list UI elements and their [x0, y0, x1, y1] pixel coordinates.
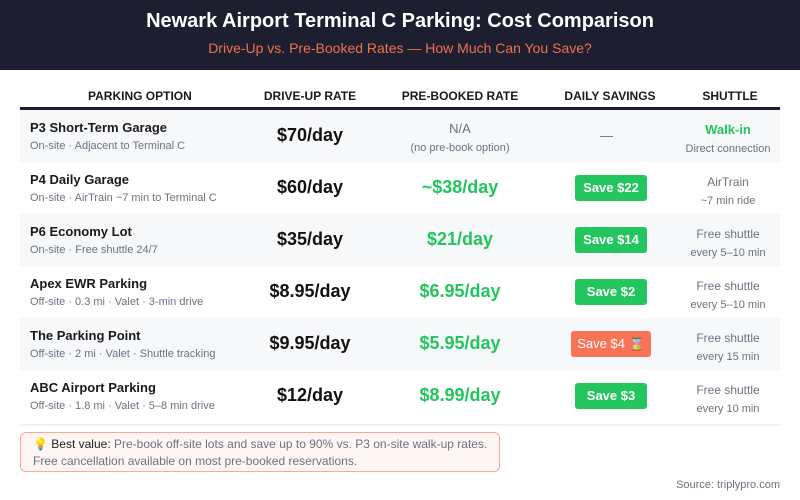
- source: Source: triplypro.com: [676, 479, 780, 491]
- callout: best value: 💡 Best value: Pre-book off-site lots and save up to 90% vs. P3 on-site walk-up rates.: [33, 437, 487, 451]
- row: P3: Walk-in: [705, 122, 751, 137]
- column headers: [88, 89, 758, 103]
- row: ABC: Free shuttle: [696, 383, 760, 397]
- text: SHUTTLE: [702, 89, 758, 103]
- row: ABC: Save $3: [587, 388, 635, 403]
- row: P4: AirTrain: [707, 175, 749, 189]
- row: Parking Point: [20, 318, 780, 370]
- row: ABC: $12/day: [277, 385, 343, 405]
- row: Parking Point: The Parking Point: [30, 328, 141, 343]
- row: ABC: Off-site · 1.8 mi · Valet · 5–8 min drive: [30, 400, 215, 412]
- row: Apex: every 5–10 min: [690, 299, 766, 311]
- row: Apex: Save $2: [587, 284, 635, 299]
- row: Apex: $8.95/day: [269, 281, 351, 301]
- row: P6: $35/day: [277, 229, 343, 249]
- text: DAILY SAVINGS: [564, 89, 656, 103]
- row: P6: every 5–10 min: [690, 247, 766, 259]
- row: P3: —: [600, 128, 613, 143]
- text: PRE-BOOKED RATE: [402, 89, 518, 103]
- row: P3: (no pre-book option): [410, 142, 510, 154]
- row: P4: $60/day: [277, 177, 343, 197]
- row: P3: [20, 110, 780, 162]
- row: P4: Save $22: [583, 180, 639, 195]
- row: Parking Point: Save $4 ⌛: [577, 336, 645, 351]
- row: ABC: $8.99/day: [419, 385, 501, 405]
- row: P6: Save $14: [583, 232, 639, 247]
- row: P4: [30, 172, 755, 207]
- row: Apex: Free shuttle: [696, 279, 760, 293]
- text: DRIVE-UP RATE: [264, 89, 356, 103]
- row: P4: P4 Daily Garage: [30, 172, 129, 187]
- row: Parking Point: Free shuttle: [696, 331, 760, 345]
- row: Parking Point: every 15 min: [696, 351, 759, 363]
- row: P3: Direct connection: [686, 143, 770, 155]
- row: Apex: $6.95/day: [419, 281, 501, 301]
- header: Newark Airport Terminal C Parking: Cost Comparison: [146, 10, 654, 32]
- row: P4: ~7 min ride: [701, 195, 755, 207]
- row: Parking Point: $9.95/day: [269, 333, 351, 353]
- row: P6: Free shuttle: [696, 227, 760, 241]
- row: P6: On-site · Free shuttle 24/7: [30, 244, 158, 256]
- row: ABC: every 10 min: [696, 403, 759, 415]
- text: PARKING OPTION: [88, 89, 192, 103]
- row: Apex: [30, 276, 766, 311]
- row: ABC: ABC Airport Parking: [30, 380, 156, 395]
- row: P6: [20, 214, 780, 266]
- row: P4: ~$38/day: [422, 177, 498, 197]
- row: Apex: Apex EWR Parking: [30, 276, 147, 291]
- callout: best value: Free cancellation available on most pre-booked reservations.: [33, 454, 357, 468]
- row: P3: P3 Short-Term Garage: [30, 120, 167, 135]
- row: Apex: Off-site · 0.3 mi · Valet · 3-min drive: [30, 296, 203, 308]
- row: Parking Point: $5.95/day: [419, 333, 501, 353]
- callout: best value: [20, 432, 500, 472]
- row: P3: $70/day: [277, 125, 343, 145]
- row: P6: $21/day: [427, 229, 493, 249]
- row: P4: On-site · AirTrain ~7 min to Terminal C: [30, 192, 217, 204]
- row: P6: P6 Economy Lot: [30, 224, 132, 239]
- header: [0, 0, 800, 70]
- row: Parking Point: Off-site · 2 mi · Valet · Shuttle tracking: [30, 348, 215, 360]
- row: P3: N/A: [449, 121, 471, 136]
- header: Drive-Up vs. Pre-Booked Rates — How Much Can You Save?: [208, 40, 592, 56]
- row: P3: On-site · Adjacent to Terminal C: [30, 140, 185, 152]
- row: ABC: [30, 380, 760, 415]
